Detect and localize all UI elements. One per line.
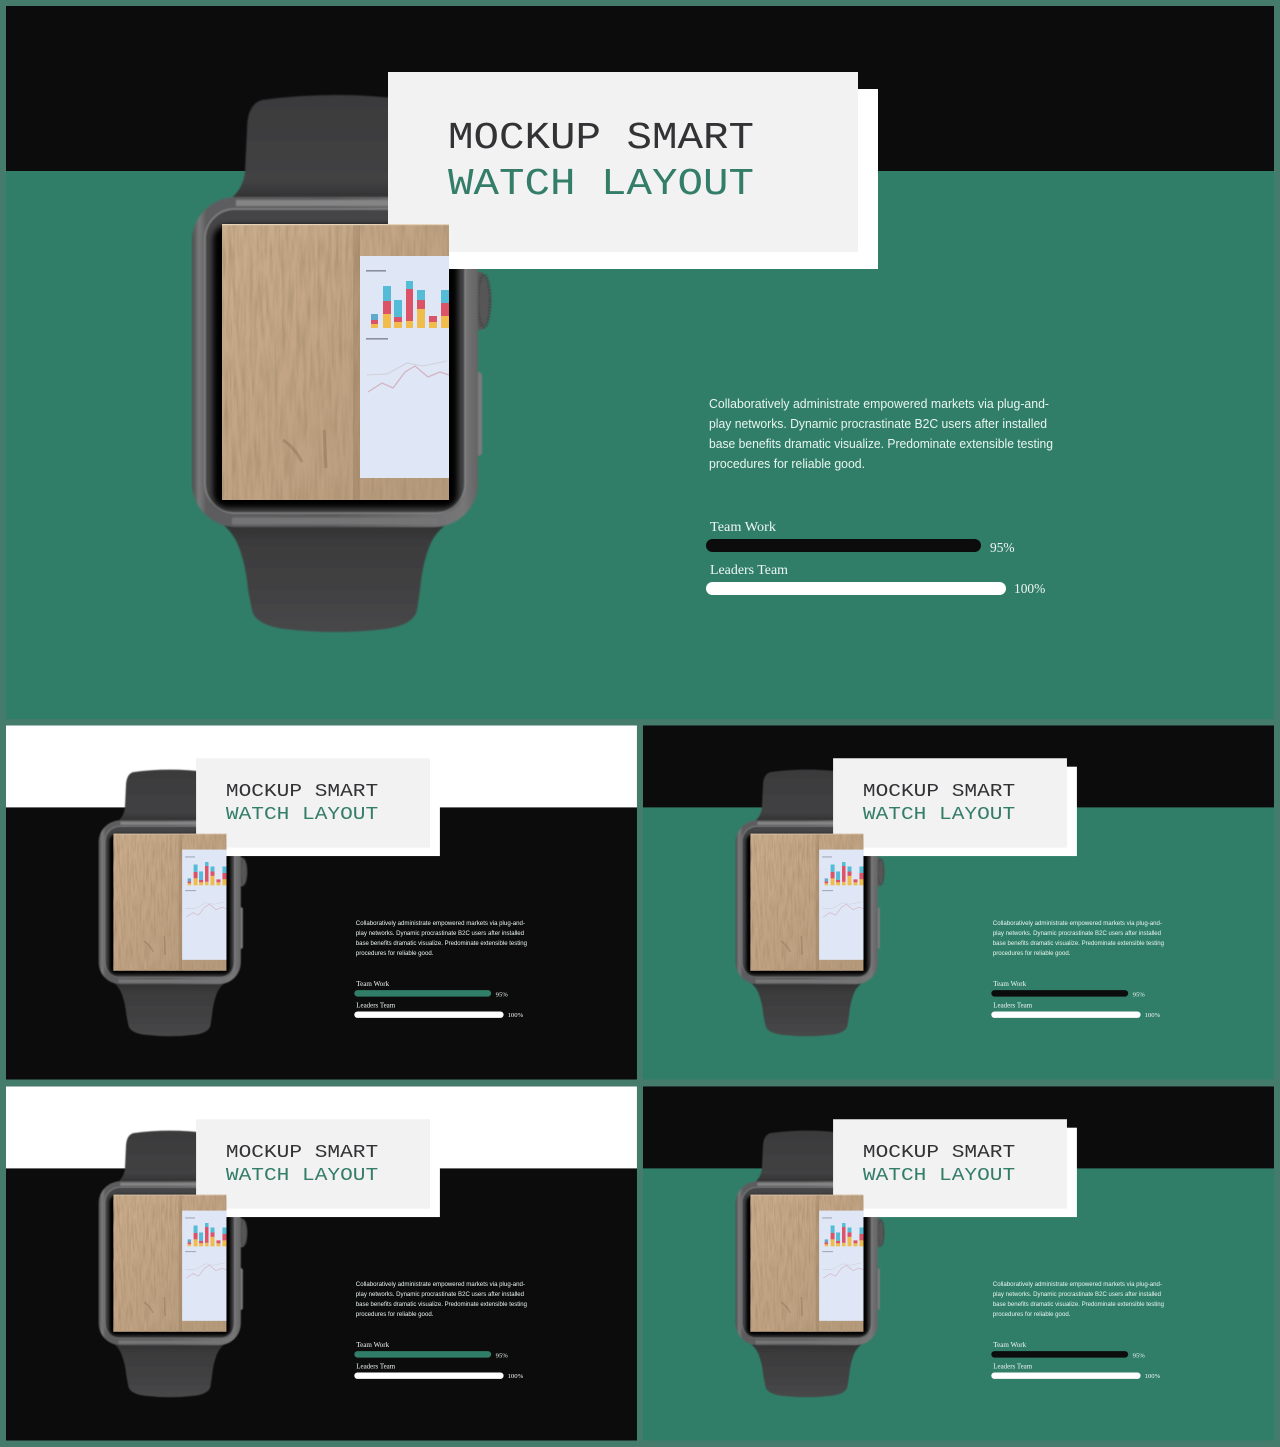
- title card: [196, 758, 430, 848]
- body text: [356, 920, 528, 957]
- title: WATCH LAYOUT: [448, 163, 754, 206]
- title card shadow: [843, 767, 1077, 856]
- progress: team work: 95%: [496, 1353, 508, 1360]
- body text: Collaboratively administrate empowered markets via plug-and-: [356, 1281, 525, 1288]
- slide: large green hero: [6, 6, 1274, 719]
- progress: team work: [706, 520, 1015, 555]
- title card shadow: [206, 1128, 440, 1217]
- body text: [709, 397, 1053, 471]
- progress: team work: Team Work: [993, 980, 1027, 988]
- progress: leaders team: 100%: [1014, 581, 1045, 596]
- body text: play networks. Dynamic procrastinate B2C users after installed: [356, 930, 525, 937]
- body text: Collaboratively administrate empowered markets via plug-and-: [709, 397, 1049, 411]
- black top band: [643, 1086, 1274, 1168]
- watch body: [192, 95, 491, 632]
- title card shadow: [206, 767, 440, 856]
- title: WATCH LAYOUT: [226, 803, 378, 825]
- title: WATCH LAYOUT: [863, 1164, 1015, 1186]
- progress: team work: Team Work: [710, 520, 776, 535]
- watch screen photo with charts: [750, 834, 863, 971]
- progress: leaders team: 100%: [1145, 1012, 1161, 1019]
- body text: [356, 1281, 528, 1318]
- watch screen photo with charts: [113, 834, 226, 971]
- slide background: [6, 1086, 637, 1440]
- progress: leaders team: [991, 1001, 1161, 1019]
- progress: team work: [354, 980, 508, 999]
- title card: [833, 758, 1067, 848]
- title card shadow: [408, 89, 878, 269]
- progress: team work: [991, 1341, 1145, 1360]
- title: [863, 1141, 1015, 1186]
- progress: leaders team: 100%: [508, 1373, 524, 1380]
- body text: base benefits dramatic visualize. Predominate extensible testing: [356, 1301, 528, 1308]
- progress: team work: 95%: [990, 540, 1015, 555]
- body text: procedures for reliable good.: [356, 1311, 434, 1318]
- slide background: [643, 1086, 1274, 1440]
- white top band: [6, 1086, 637, 1168]
- title: MOCKUP SMART: [226, 780, 378, 802]
- title card: [833, 1119, 1067, 1209]
- progress: leaders team: 100%: [1145, 1373, 1161, 1380]
- body text: play networks. Dynamic procrastinate B2C users after installed: [709, 417, 1047, 431]
- title: [226, 780, 378, 825]
- black top band: [643, 725, 1274, 807]
- progress: leaders team: Leaders Team: [993, 1001, 1033, 1009]
- title: [226, 1141, 378, 1186]
- title: WATCH LAYOUT: [863, 803, 1015, 825]
- slide: small white and black, row two: [6, 1086, 637, 1440]
- title: MOCKUP SMART: [863, 1141, 1015, 1163]
- slide: small black and green, row one: [643, 725, 1274, 1079]
- watch screen photo with charts: [113, 1195, 226, 1332]
- title: MOCKUP SMART: [448, 117, 754, 160]
- white top band: [6, 725, 637, 807]
- title card: [196, 1119, 430, 1209]
- progress: leaders team: Leaders Team: [710, 563, 788, 578]
- body text: base benefits dramatic visualize. Predominate extensible testing: [356, 940, 528, 947]
- body text: Collaboratively administrate empowered markets via plug-and-: [993, 1281, 1162, 1288]
- black top band: [6, 6, 1274, 171]
- body text: play networks. Dynamic procrastinate B2C users after installed: [356, 1291, 525, 1298]
- body text: procedures for reliable good.: [356, 950, 434, 957]
- body text: play networks. Dynamic procrastinate B2C users after installed: [993, 1291, 1162, 1298]
- watch body: [736, 770, 884, 1036]
- progress: leaders team: Leaders Team: [993, 1362, 1033, 1370]
- progress: team work: [354, 1341, 508, 1360]
- slide: small black and green, row two: [643, 1086, 1274, 1440]
- title: MOCKUP SMART: [226, 1141, 378, 1163]
- progress: team work: 95%: [1133, 992, 1145, 999]
- watch body: [99, 770, 247, 1036]
- watch body: [99, 1131, 247, 1397]
- progress: team work: 95%: [1133, 1353, 1145, 1360]
- title: [448, 117, 754, 206]
- body text: procedures for reliable good.: [993, 950, 1071, 957]
- body text: procedures for reliable good.: [709, 457, 865, 471]
- progress: team work: [991, 980, 1145, 999]
- progress: team work: Team Work: [993, 1341, 1027, 1349]
- progress: team work: Team Work: [356, 1341, 390, 1349]
- progress: leaders team: [354, 1362, 524, 1380]
- body text: [993, 1281, 1165, 1318]
- progress: team work: Team Work: [356, 980, 390, 988]
- body text: Collaboratively administrate empowered markets via plug-and-: [356, 920, 525, 927]
- progress: leaders team: [354, 1001, 524, 1019]
- body text: [993, 920, 1165, 957]
- title card shadow: [843, 1128, 1077, 1217]
- slide background: [6, 6, 1274, 719]
- title: [863, 780, 1015, 825]
- title card: [388, 72, 858, 252]
- title: MOCKUP SMART: [863, 780, 1015, 802]
- watch screen photo with charts: [750, 1195, 863, 1332]
- slide: small white and black, row one: [6, 725, 637, 1079]
- progress: team work: 95%: [496, 992, 508, 999]
- slide background: [643, 725, 1274, 1079]
- body text: Collaboratively administrate empowered markets via plug-and-: [993, 920, 1162, 927]
- body text: play networks. Dynamic procrastinate B2C users after installed: [993, 930, 1162, 937]
- progress: leaders team: Leaders Team: [356, 1001, 396, 1009]
- watch screen photo with charts: [222, 224, 449, 500]
- body text: base benefits dramatic visualize. Predominate extensible testing: [993, 1301, 1165, 1308]
- progress: leaders team: Leaders Team: [356, 1362, 396, 1370]
- slide background: [6, 725, 637, 1079]
- progress: leaders team: [991, 1362, 1161, 1380]
- body text: procedures for reliable good.: [993, 1311, 1071, 1318]
- body text: base benefits dramatic visualize. Predominate extensible testing: [709, 437, 1053, 451]
- title: WATCH LAYOUT: [226, 1164, 378, 1186]
- progress: leaders team: [706, 563, 1045, 596]
- progress: leaders team: 100%: [508, 1012, 524, 1019]
- body text: base benefits dramatic visualize. Predominate extensible testing: [993, 940, 1165, 947]
- watch body: [736, 1131, 884, 1397]
